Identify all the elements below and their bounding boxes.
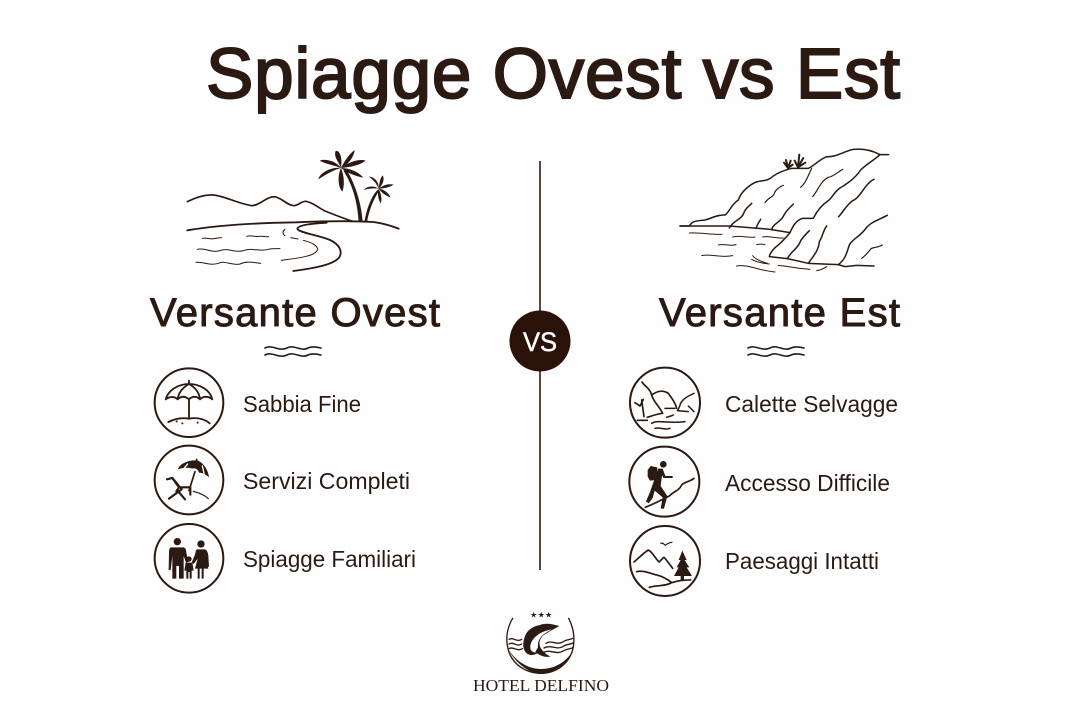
icon: family — [155, 524, 223, 593]
label: paesaggi intatti: Paesaggi Intatti — [725, 548, 879, 574]
VS badge: VS — [523, 327, 557, 357]
label: sabbia fine: Sabbia Fine — [243, 391, 361, 417]
heading: versante est: Versante Est — [659, 291, 900, 335]
label: accesso difficile: Accesso Difficile — [725, 470, 890, 496]
icon: deck chair and umbrella — [155, 446, 223, 514]
icon: hiker — [629, 447, 699, 517]
dolphin — [523, 624, 559, 657]
heading: versante ovest: Versante Ovest — [150, 291, 440, 335]
wave ornament — [265, 347, 321, 356]
palm trees — [318, 150, 394, 222]
icon: wild coves — [630, 368, 700, 438]
illustration: beach with palms — [187, 150, 399, 271]
label: servizi completi: Servizi Completi — [243, 468, 410, 494]
icon: untouched landscape — [630, 526, 700, 596]
illustration: rocky cliff — [680, 149, 889, 272]
VS badge — [510, 310, 570, 372]
panel: versante ovest — [150, 150, 440, 593]
wave ornament — [748, 347, 804, 356]
label: spiagge familiari: Spiagge Familiari — [243, 546, 416, 572]
stars: ★★★ — [530, 610, 553, 619]
logo: hotel delfino — [473, 610, 609, 695]
panel: versante est — [629, 149, 900, 596]
icon: beach umbrella — [155, 368, 223, 437]
label: calette selvagge: Calette Selvagge — [725, 391, 898, 417]
hotel name: HOTEL DELFINO — [473, 676, 609, 695]
center divider — [539, 161, 541, 570]
title: Spiagge Ovest vs Est — [206, 35, 900, 114]
